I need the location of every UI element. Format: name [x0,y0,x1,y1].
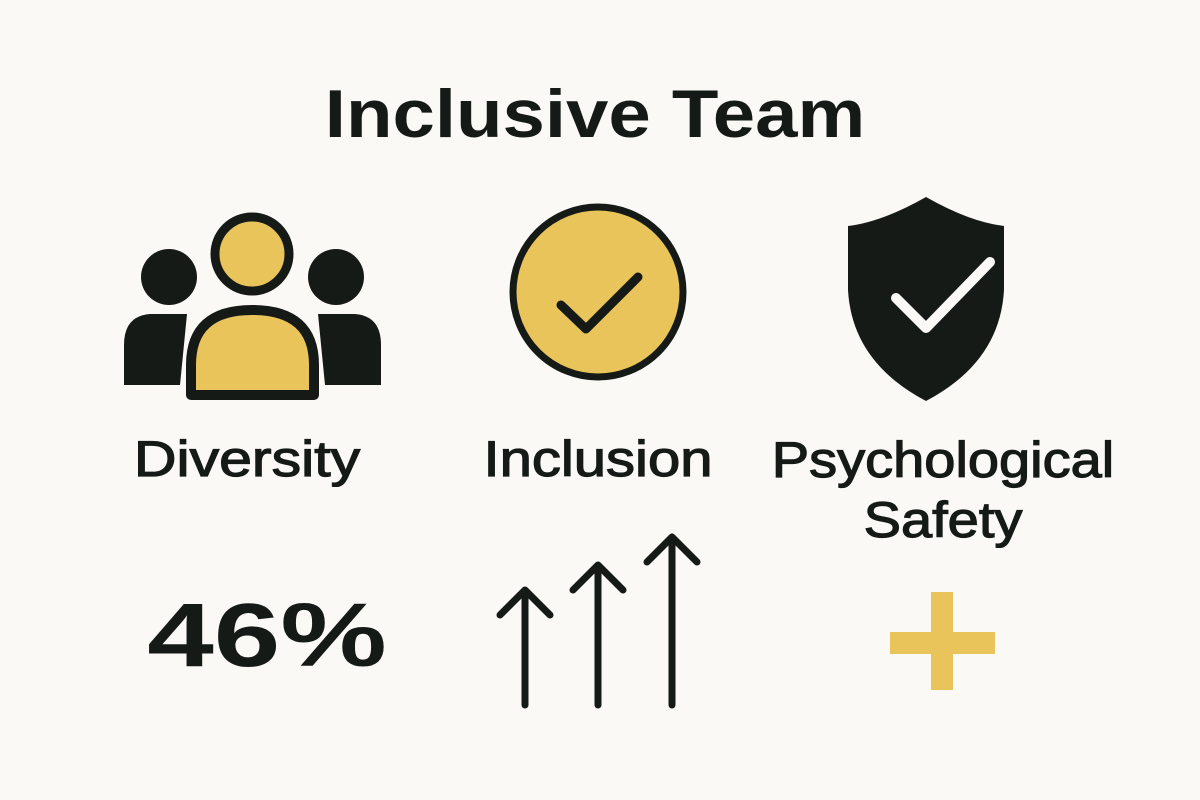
label: psychological safety [772,432,1114,548]
icon: people [124,217,381,395]
icon: plus [890,592,995,690]
arrows [500,537,697,705]
stat: 46%: 46% [147,586,387,686]
label: psychological safety: Psychological [772,432,1114,488]
title: Inclusive Team [325,76,865,152]
label: inclusion: Inclusion [484,431,712,487]
icon: shield [848,197,1004,401]
icon: check circle [513,207,683,377]
label: diversity: Diversity [134,431,360,487]
label: psychological safety: Safety [864,492,1022,548]
